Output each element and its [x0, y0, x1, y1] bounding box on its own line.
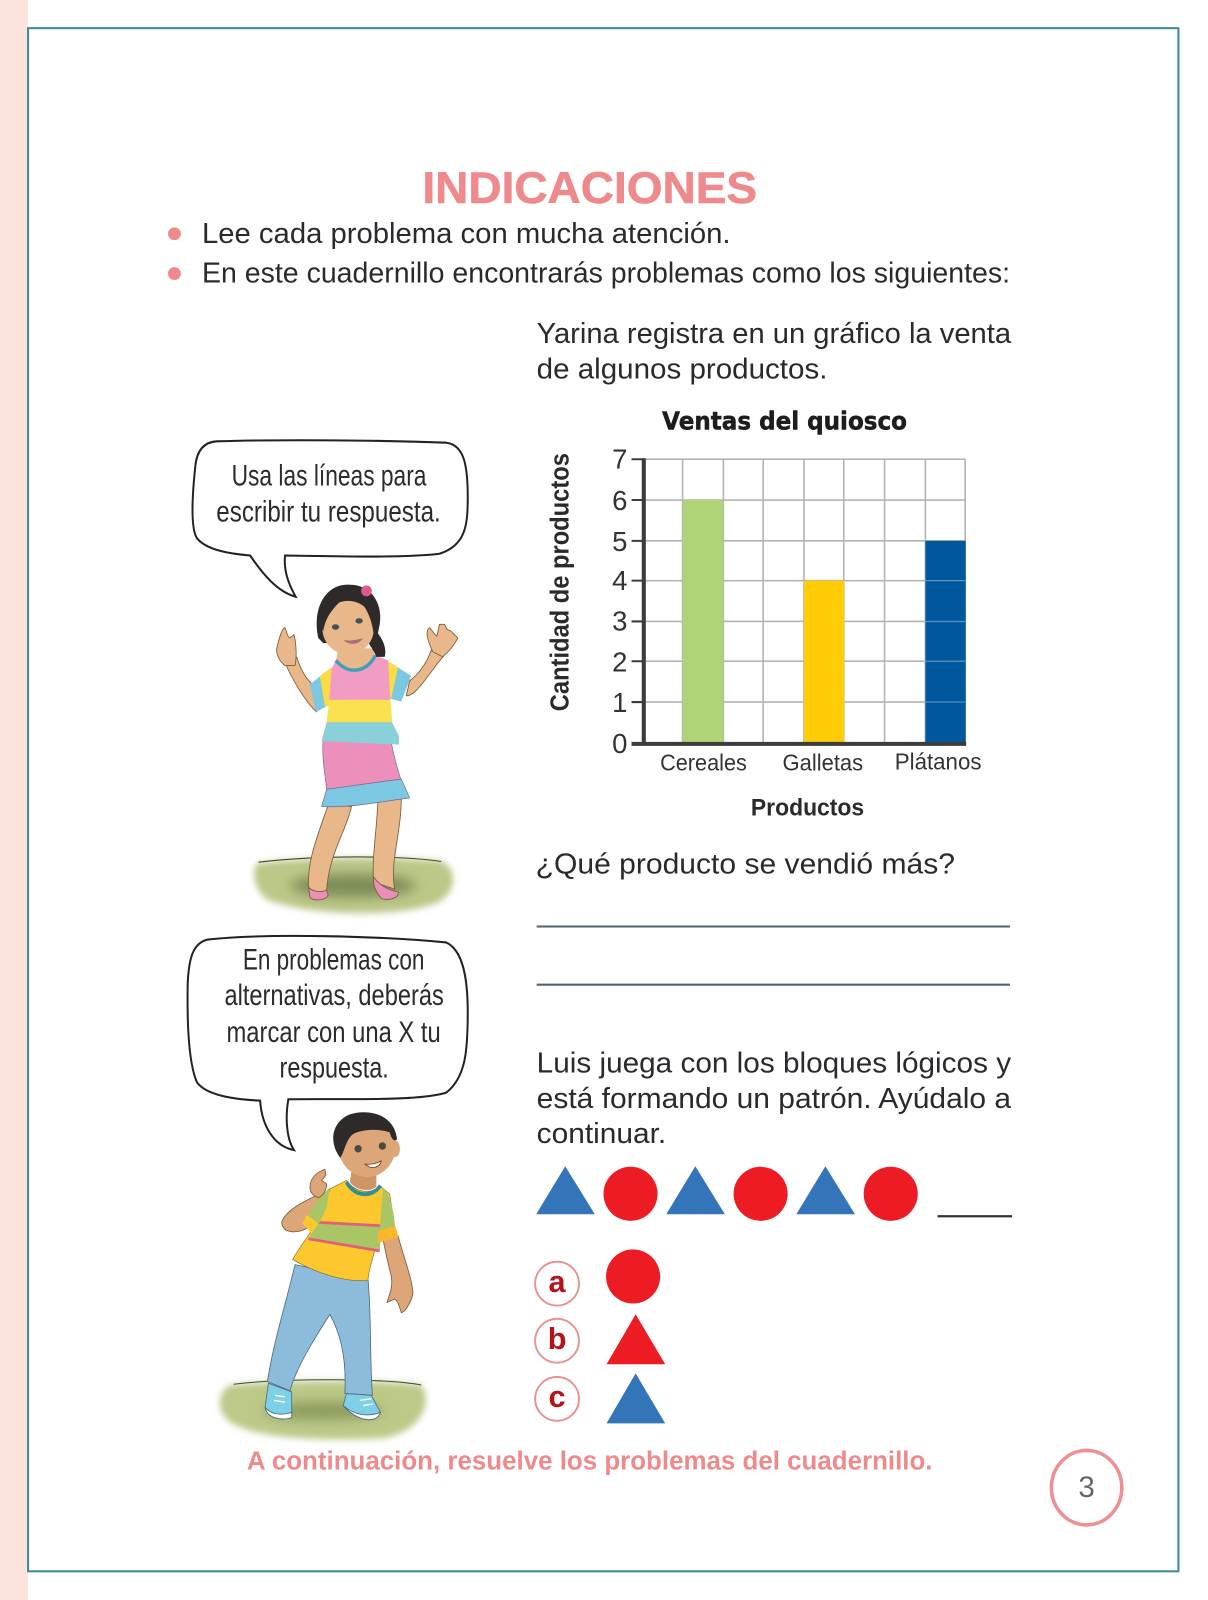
bar gridlines: [925, 581, 965, 702]
problem 2 statement: [537, 1047, 1012, 1150]
y axis numbers: 2: [612, 646, 627, 677]
chart title: Ventas del quiosco: [662, 407, 907, 436]
axis lines thick: [632, 458, 966, 746]
ground shadow: [263, 1402, 383, 1420]
arms and hands: [277, 624, 458, 712]
page number: [1051, 1450, 1122, 1525]
horizon line: [258, 857, 441, 862]
bubble text: girl: Usa las líneas para: [232, 460, 427, 493]
axis ticks: [632, 459, 644, 702]
shape pattern: [536, 1166, 1012, 1221]
bubble text: boy: respuesta.: [280, 1052, 389, 1085]
option c: [535, 1373, 665, 1423]
bubble text: boy: alternativas, deberás: [224, 979, 444, 1012]
bubble outline: [188, 936, 468, 1150]
boy illustration: [220, 1112, 426, 1439]
sleeves: [310, 658, 411, 712]
speech bubble: boy: [188, 936, 468, 1150]
title: INDICACIONES: [422, 162, 757, 213]
horizon line: [234, 1380, 421, 1385]
instruction 2: En este cuadernillo encontrarás problemas como los siguientes:: [202, 258, 1010, 290]
jeans: [267, 1265, 372, 1395]
collar: [346, 1182, 380, 1194]
bullet 2: [168, 267, 181, 280]
page number: 3: [1078, 1471, 1095, 1504]
bubble text: girl: [216, 460, 441, 528]
bar: cereales: [683, 500, 723, 744]
right arm: [383, 1235, 413, 1313]
y axis title: Cantidad de productos: [546, 453, 574, 711]
face: [332, 618, 363, 644]
problem 2 statement: Luis juega con los bloques lógicos y: [537, 1047, 1012, 1079]
shoes: [265, 1383, 380, 1420]
bullet 1: [168, 227, 181, 240]
footer note: A continuación, resuelve los problemas del cuadernillo.: [247, 1447, 933, 1475]
problem 2 statement: continuar.: [537, 1118, 666, 1150]
y axis numbers: 0: [612, 728, 627, 759]
answer lines: [537, 927, 1010, 985]
option a: a: [549, 1265, 567, 1299]
category labels: [660, 748, 982, 775]
bar chart: ventas del quiosco: [546, 407, 982, 821]
shirt: [293, 1180, 395, 1281]
question: ¿Qué producto se vendió más?: [536, 848, 955, 880]
bubble text: boy: [224, 943, 444, 1085]
legs and shoes: [308, 798, 401, 900]
problem 2 statement: está formando un patrón. Ayúdalo a: [537, 1083, 1011, 1115]
skirt: [322, 738, 410, 807]
option b: [535, 1314, 665, 1364]
bar: platanos: [925, 541, 966, 744]
instructions list: [168, 218, 1010, 290]
grid: [644, 459, 965, 744]
speech bubble: girl: [192, 440, 468, 597]
problem 1 statement: de algunos productos.: [537, 354, 827, 386]
y axis numbers: [612, 443, 627, 759]
ground: [254, 858, 453, 913]
y axis numbers: 1: [612, 687, 627, 718]
head: [322, 601, 374, 655]
face: [354, 1142, 386, 1168]
ground: [220, 1381, 426, 1439]
fist: [310, 1169, 327, 1198]
option b: b: [548, 1322, 566, 1356]
y axis numbers: 3: [612, 606, 627, 637]
left page band: [0, 0, 28, 1600]
category labels: Galletas: [783, 749, 863, 775]
sleeves: [303, 1187, 399, 1243]
bar: galletas: [804, 581, 844, 744]
blouse: [322, 655, 399, 745]
fringe: [318, 591, 380, 635]
category labels: Cereales: [660, 749, 747, 775]
shirt stripe: [308, 1222, 381, 1251]
bubble text: boy: En problemas con: [243, 943, 424, 976]
option a: [535, 1249, 660, 1306]
problem 1 statement: [537, 318, 1011, 386]
instruction 1: Lee cada problema con mucha atención.: [202, 218, 731, 250]
neck: [350, 1172, 376, 1190]
collar: [336, 655, 375, 670]
problem 1 statement: Yarina registra en un gráfico la venta: [537, 318, 1011, 350]
back hair: [317, 585, 380, 643]
hair flower: [361, 585, 372, 596]
head: [339, 1118, 395, 1177]
hair: [333, 1112, 397, 1158]
ground shadow: [290, 874, 416, 897]
bubble text: boy: marcar con una X tu: [226, 1016, 441, 1049]
option c: c: [549, 1380, 566, 1414]
y axis numbers: 6: [612, 485, 627, 516]
bubble text: girl: escribir tu respuesta.: [216, 495, 441, 528]
left arm: [282, 1191, 323, 1232]
neck: [337, 648, 375, 669]
braid: [366, 628, 385, 657]
ears: [391, 1140, 400, 1157]
y axis numbers: 7: [612, 443, 627, 474]
girl illustration: [254, 585, 458, 913]
x axis title: Productos: [751, 794, 864, 821]
category labels: Plátanos: [895, 748, 981, 774]
bubble outline: [192, 440, 468, 597]
y axis numbers: 4: [612, 565, 627, 596]
y axis numbers: 5: [612, 526, 627, 557]
